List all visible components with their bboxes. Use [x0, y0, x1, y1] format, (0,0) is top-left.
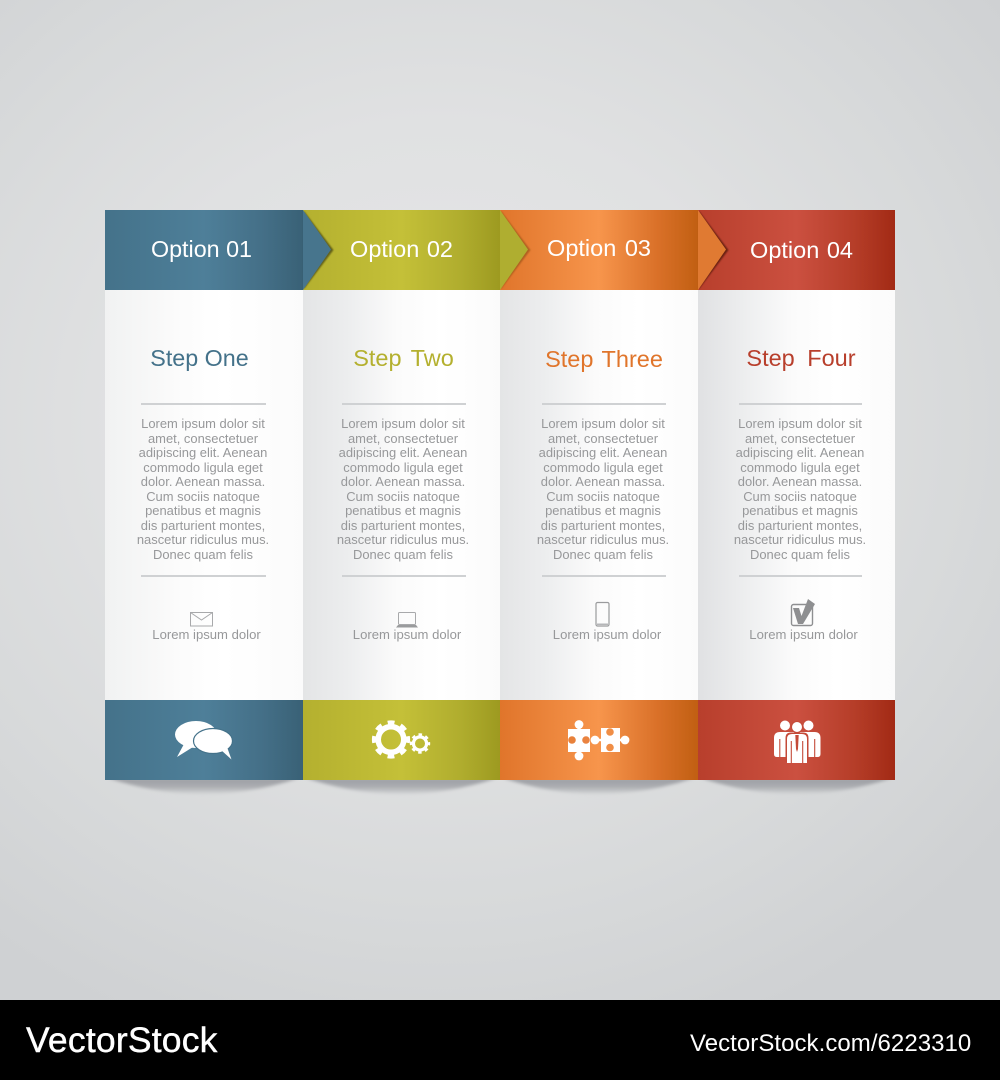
text block 1	[137, 403, 269, 577]
icon: gears	[374, 723, 429, 756]
text block 2: amet, consectetuer	[348, 431, 458, 446]
text block 4: commodo ligula eget	[740, 460, 860, 475]
text block 3: commodo ligula eget	[543, 460, 663, 475]
icon: puzzle pieces	[568, 720, 629, 760]
header: orange	[500, 210, 698, 290]
text block 4: penatibus et magnis	[742, 503, 858, 518]
text block 4: Donec quam felis	[750, 547, 850, 562]
text block 2: Lorem ipsum dolor sit	[341, 416, 465, 431]
text block 3: Cum sociis natoque	[546, 489, 660, 504]
footer bar	[0, 1000, 1000, 1080]
panel bodies	[105, 290, 895, 700]
icon: envelope	[190, 612, 212, 626]
text block 1: commodo ligula eget	[143, 460, 263, 475]
caption 2: Lorem ipsum dolor	[353, 627, 461, 642]
icon: checkbox	[792, 599, 815, 626]
text block 2	[337, 403, 469, 577]
text block 3: Lorem ipsum dolor sit	[541, 416, 665, 431]
text block 4: amet, consectetuer	[745, 431, 855, 446]
text block 2: adipiscing elit. Aenean	[339, 445, 467, 460]
text block 3: penatibus et magnis	[545, 503, 661, 518]
text block 2: commodo ligula eget	[343, 460, 463, 475]
panel shadows	[111, 780, 889, 794]
text block 3: dis parturient montes,	[541, 518, 665, 533]
body column 1	[105, 290, 302, 700]
header: green	[303, 210, 500, 290]
footer: blue	[105, 700, 303, 780]
text block 4	[734, 403, 866, 577]
icon: smartphone	[596, 602, 609, 626]
text block 3: Donec quam felis	[553, 547, 653, 562]
body column 4	[698, 290, 895, 700]
text block 4: dolor. Aenean massa.	[738, 474, 862, 489]
arrow: orange to red	[698, 210, 728, 290]
footer: red	[698, 700, 895, 780]
heading: Step Four: Step Four	[746, 345, 856, 371]
heading: Step One: Step One	[150, 345, 249, 371]
text block 3	[537, 403, 669, 577]
watermark: VectorStock logo: VectorStock	[26, 1020, 218, 1060]
text block 1: dolor. Aenean massa.	[141, 474, 265, 489]
text block 2: dis parturient montes,	[341, 518, 465, 533]
text block 1: nascetur ridiculus mus.	[137, 532, 269, 547]
heading: Option 03: Option 03	[547, 235, 651, 261]
text block 1: Donec quam felis	[153, 547, 253, 562]
footer: green	[303, 700, 500, 780]
header: blue	[105, 210, 303, 290]
arrow: green to orange	[500, 210, 530, 290]
text block 2: dolor. Aenean massa.	[341, 474, 465, 489]
caption 4: Lorem ipsum dolor	[749, 627, 858, 642]
text block 2: penatibus et magnis	[345, 503, 461, 518]
body column 2	[302, 290, 500, 700]
text block 3: adipiscing elit. Aenean	[539, 445, 667, 460]
caption 3: Lorem ipsum dolor	[553, 627, 661, 642]
text block 1: dis parturient montes,	[141, 518, 265, 533]
header: red	[698, 210, 895, 290]
text block 4: Lorem ipsum dolor sit	[738, 416, 862, 431]
text block 4: nascetur ridiculus mus.	[734, 532, 866, 547]
heading: Option 01: Option 01	[151, 236, 252, 262]
icon: team	[774, 720, 820, 764]
text block 4: Cum sociis natoque	[743, 489, 857, 504]
arrow: blue to green	[303, 210, 334, 290]
text block 2: Cum sociis natoque	[346, 489, 460, 504]
watermark: URL: VectorStock.com/6223310	[690, 1030, 971, 1057]
caption 1: Lorem ipsum dolor	[152, 627, 261, 642]
heading: Option 02: Option 02	[350, 236, 453, 262]
heading: Step Three: Step Three	[545, 346, 663, 372]
icon: speech bubbles	[175, 721, 232, 760]
text block 1: Cum sociis natoque	[146, 489, 260, 504]
text block 3: amet, consectetuer	[548, 431, 658, 446]
heading: Option 04: Option 04	[750, 237, 853, 263]
text block 2: Donec quam felis	[353, 547, 453, 562]
heading: Step Two: Step Two	[353, 345, 454, 371]
body column 3	[500, 290, 698, 700]
text block 4: adipiscing elit. Aenean	[736, 445, 864, 460]
icon: laptop	[396, 612, 418, 628]
text block 1: Lorem ipsum dolor sit	[141, 416, 265, 431]
text block 3: nascetur ridiculus mus.	[537, 532, 669, 547]
text block 4: dis parturient montes,	[738, 518, 862, 533]
text block 3: dolor. Aenean massa.	[541, 474, 665, 489]
text block 1: adipiscing elit. Aenean	[139, 445, 267, 460]
text block 1: penatibus et magnis	[145, 503, 261, 518]
footer: orange	[500, 700, 698, 780]
text block 2: nascetur ridiculus mus.	[337, 532, 469, 547]
text block 1: amet, consectetuer	[148, 431, 258, 446]
